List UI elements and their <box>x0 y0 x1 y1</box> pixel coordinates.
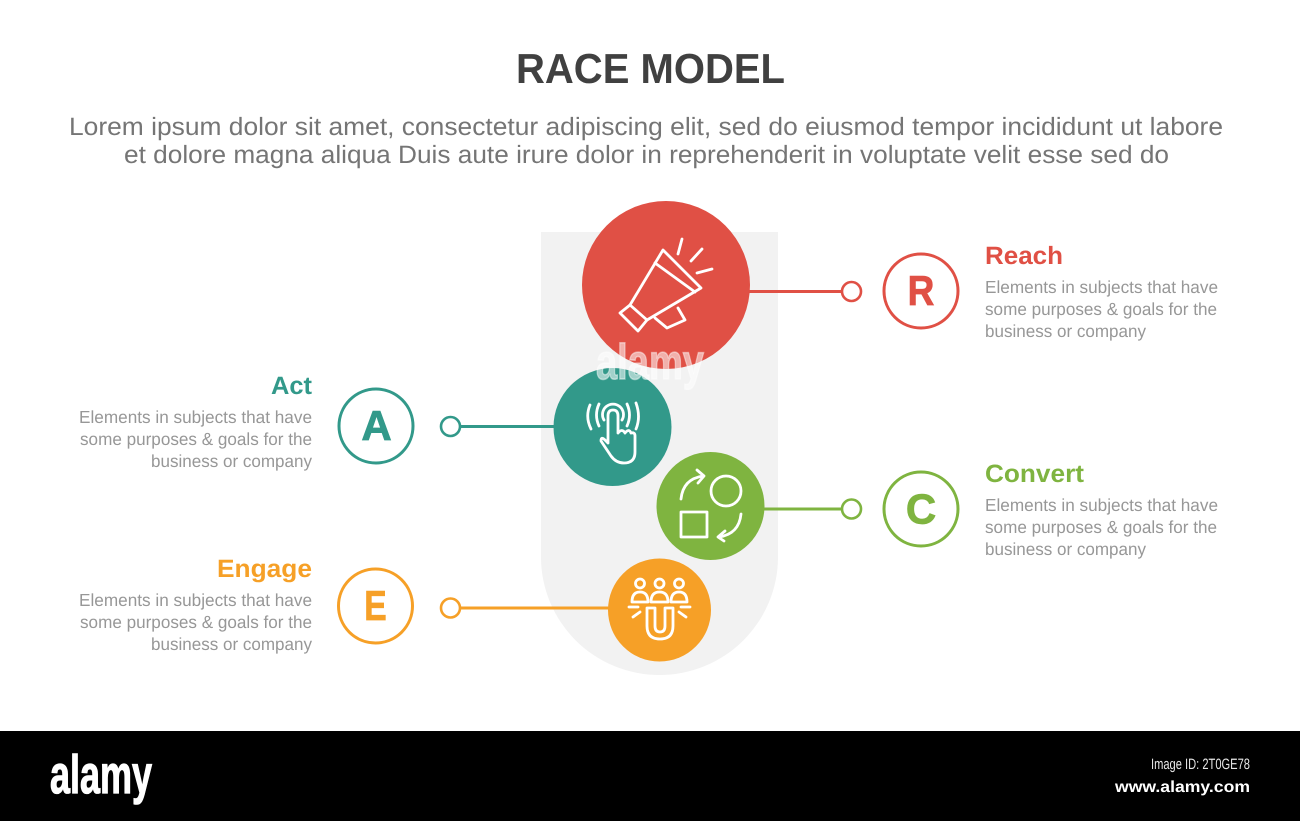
heading: reach: Reach <box>985 242 1063 270</box>
letter badge: C <box>884 472 958 546</box>
letter badge: R <box>884 254 958 328</box>
connector: engage <box>441 598 615 618</box>
heading: convert: Convert <box>985 460 1085 488</box>
description: engage: some purposes & goals for the <box>80 612 312 632</box>
description: act: business or company <box>151 451 312 471</box>
description: convert: business or company <box>985 539 1146 559</box>
panel: act <box>79 368 672 486</box>
description: convert: some purposes & goals for the <box>985 517 1217 537</box>
letter badge: A <box>339 389 413 463</box>
subtitle text: Lorem ipsum dolor sit amet, consectetur adipiscing elit, sed do eiusmod tempor incididunt ut labore <box>69 113 1223 141</box>
icon: cycle shapes <box>681 470 741 541</box>
circle: act <box>554 368 672 486</box>
description: reach <box>985 277 1218 341</box>
watermark: alamy <box>596 334 704 390</box>
footer bar <box>0 731 1300 821</box>
letter badge: E <box>338 569 412 643</box>
description: engage: business or company <box>151 634 312 654</box>
heading: engage: Engage <box>217 555 312 583</box>
circle: convert <box>656 452 764 560</box>
website: www.alamy.com <box>1114 779 1250 796</box>
icon: people magnet <box>629 579 690 639</box>
icon: megaphone <box>620 239 712 331</box>
heading: act: Act <box>271 372 313 400</box>
panel: convert <box>656 452 1218 560</box>
letter badge: R: R <box>908 267 934 314</box>
connector: reach <box>745 282 861 301</box>
description: act <box>79 407 312 471</box>
letter badge: A: A <box>361 402 392 449</box>
footer logo: alamy <box>50 745 152 805</box>
description: act: Elements in subjects that have <box>79 407 312 427</box>
panel: engage <box>79 555 711 662</box>
description: act: some purposes & goals for the <box>80 429 312 449</box>
letter badge: C: C <box>906 486 936 532</box>
description: engage: Elements in subjects that have <box>79 590 312 610</box>
background capsule <box>541 232 778 675</box>
image id: Image ID: 2T0GE78 <box>1151 756 1250 773</box>
description: convert: Elements in subjects that have <box>985 495 1218 515</box>
icon: touch hand <box>588 403 638 463</box>
description: reach: Elements in subjects that have <box>985 277 1218 297</box>
description: reach: business or company <box>985 321 1146 341</box>
circle: reach <box>582 201 750 369</box>
panel: reach <box>582 201 1218 369</box>
letter badge: E: E <box>364 582 387 629</box>
title: RACE MODEL <box>516 45 785 92</box>
circle: engage <box>608 558 711 662</box>
description: reach: some purposes & goals for the <box>985 299 1217 319</box>
description: engage <box>79 590 312 654</box>
description: convert <box>985 495 1218 559</box>
connector: act <box>441 417 560 436</box>
connector: convert <box>760 500 861 518</box>
subtitle text <box>69 113 1223 169</box>
subtitle text: et dolore magna aliqua Duis aute irure dolor in reprehenderit in voluptate velit esse sed do <box>124 141 1169 169</box>
